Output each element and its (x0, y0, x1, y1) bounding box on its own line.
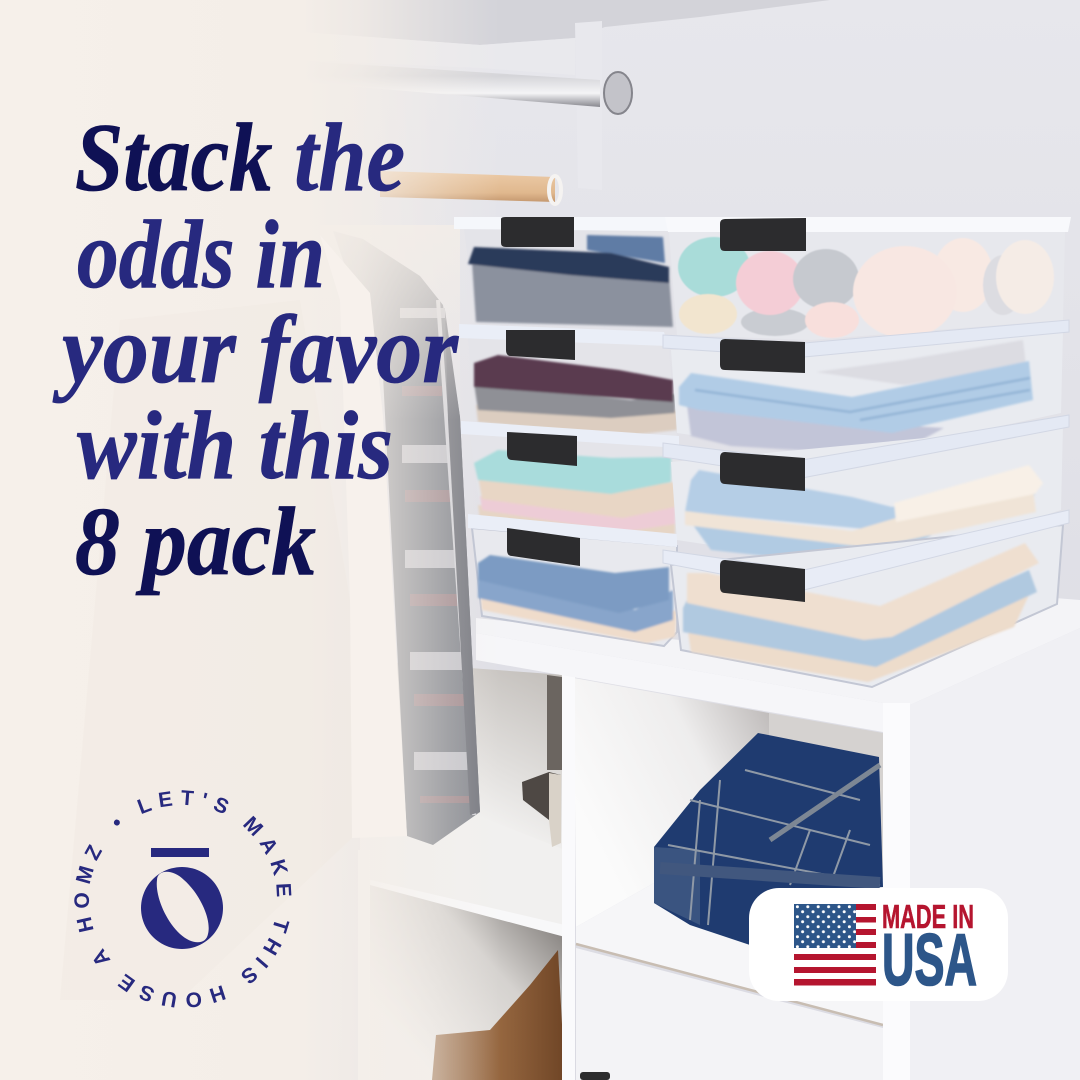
cardigan hanging (320, 235, 407, 838)
shirt light and red stripes (400, 308, 472, 803)
middle cubby back wall (769, 713, 883, 900)
ceiling shelf (0, 0, 830, 45)
plaid shirt hanging (333, 231, 480, 845)
right side panel (910, 628, 1080, 1080)
flag (794, 904, 876, 986)
box: right 3 blue and cream (663, 415, 1069, 570)
brand logo seal (74, 790, 292, 1008)
wall moulding (300, 32, 575, 75)
wooden hanging rod (380, 171, 561, 204)
made in text: MADE IN (882, 898, 974, 935)
USA text: USA (882, 920, 977, 1001)
logo letter o (141, 867, 223, 949)
brown bag (432, 950, 565, 1080)
left cream fade overlay (0, 0, 500, 1080)
centre panel (562, 675, 575, 1080)
shelf unit (358, 598, 1080, 1080)
lower left cubby (370, 885, 565, 1080)
box: left 1 navy and grey (454, 217, 673, 328)
box: right 2 blue folded (663, 320, 1069, 458)
faint garment shading (60, 300, 352, 1000)
headline: Stack the (75, 104, 405, 211)
middle cubby side wall (574, 678, 769, 927)
logo bar (151, 848, 209, 857)
wall hook (522, 772, 561, 847)
upper left cubby (360, 660, 565, 930)
box: left 2 plum and grey (459, 324, 677, 437)
closet rail (0, 21, 632, 190)
denim jacket on shelf (654, 733, 883, 945)
headline: 8 pack (75, 488, 316, 595)
box: right 4 cream and blue (663, 510, 1069, 687)
headline: your favor (53, 296, 459, 403)
drawer front (576, 948, 883, 1080)
latches (501, 217, 806, 602)
shelf top (476, 598, 1080, 705)
storage boxes (454, 217, 1071, 687)
middle shelf surface (576, 880, 883, 1025)
box: left 4 denim and beige (468, 514, 677, 646)
made in USA badge (749, 888, 1008, 1001)
circular tagline: • LET'S MAKE THIS HOUSE A HOMZ (74, 790, 292, 1008)
shirt shoulder fade (320, 225, 460, 425)
headline (53, 104, 459, 595)
headline: odds in (77, 201, 325, 308)
box: right 1 yarn (665, 217, 1071, 340)
box: left 3 teal beige pink (461, 421, 679, 538)
headline: with this (77, 392, 393, 499)
